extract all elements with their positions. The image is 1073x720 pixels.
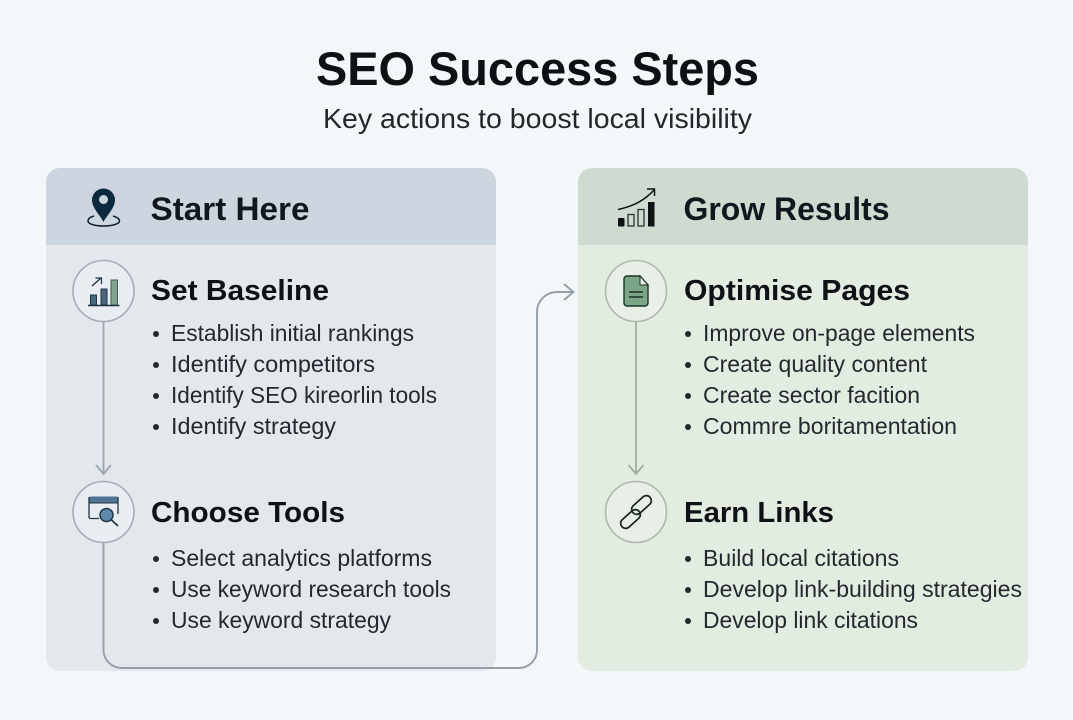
list: set baseline: [153, 320, 437, 439]
heading: choose tools: Choose Tools: [151, 497, 345, 529]
step: optimise pages: [606, 260, 975, 439]
panel header band: [578, 168, 1028, 245]
subtitle: Key actions to boost local visibility: [323, 103, 752, 134]
list: optimise pages: Commre boritamentation: [703, 413, 957, 439]
icon: rising bars with arrow: [618, 189, 654, 226]
list: optimise pages: Create quality content: [703, 351, 928, 377]
panel header band: [46, 168, 496, 245]
panel: start here: [46, 168, 496, 671]
list: choose tools: Use keyword strategy: [171, 607, 391, 633]
list: optimise pages: Improve on-page elements: [703, 320, 975, 346]
icon: chain link in circle: [606, 482, 666, 542]
list: earn links: Develop link citations: [703, 607, 918, 633]
heading: earn links: Earn Links: [684, 497, 834, 529]
list: set baseline: Establish initial rankings: [171, 320, 414, 346]
icon: bar chart in circle: [73, 260, 134, 322]
arrow: optimise pages to earn links: [628, 322, 644, 474]
icon: document in circle: [606, 260, 666, 322]
heading: set baseline: Set Baseline: [151, 275, 329, 307]
heading: start here: Start Here: [150, 191, 310, 227]
heading: optimise pages: Optimise Pages: [684, 275, 910, 307]
step: choose tools: [73, 482, 451, 633]
heading: grow results: Grow Results: [684, 191, 890, 227]
step: earn links: [606, 482, 1022, 633]
panel body: [578, 240, 1028, 671]
list: earn links: Develop link-building strategies: [703, 576, 1022, 602]
list: set baseline: Identify strategy: [171, 413, 337, 439]
list: choose tools: Select analytics platforms: [171, 545, 432, 571]
list: set baseline: Identify competitors: [171, 351, 375, 377]
list: choose tools: Use keyword research tools: [171, 576, 451, 602]
list: earn links: Build local citations: [703, 545, 899, 571]
list: optimise pages: Create sector facition: [703, 382, 920, 408]
panel: grow results: [578, 168, 1028, 671]
list: choose tools: [153, 545, 451, 633]
title: SEO Success Steps: [316, 42, 759, 95]
icon: map pin: [88, 188, 120, 226]
list: earn links: [685, 545, 1022, 633]
list: set baseline: Identify SEO kireorlin tools: [171, 382, 437, 408]
arrow: connector from choose tools to optimise pages: [104, 284, 574, 668]
step: set baseline: [73, 260, 437, 439]
icon: browser with magnifier in circle: [73, 482, 134, 542]
panel body: [46, 240, 496, 671]
arrow: set baseline to choose tools: [96, 322, 111, 474]
list: optimise pages: [685, 320, 975, 439]
